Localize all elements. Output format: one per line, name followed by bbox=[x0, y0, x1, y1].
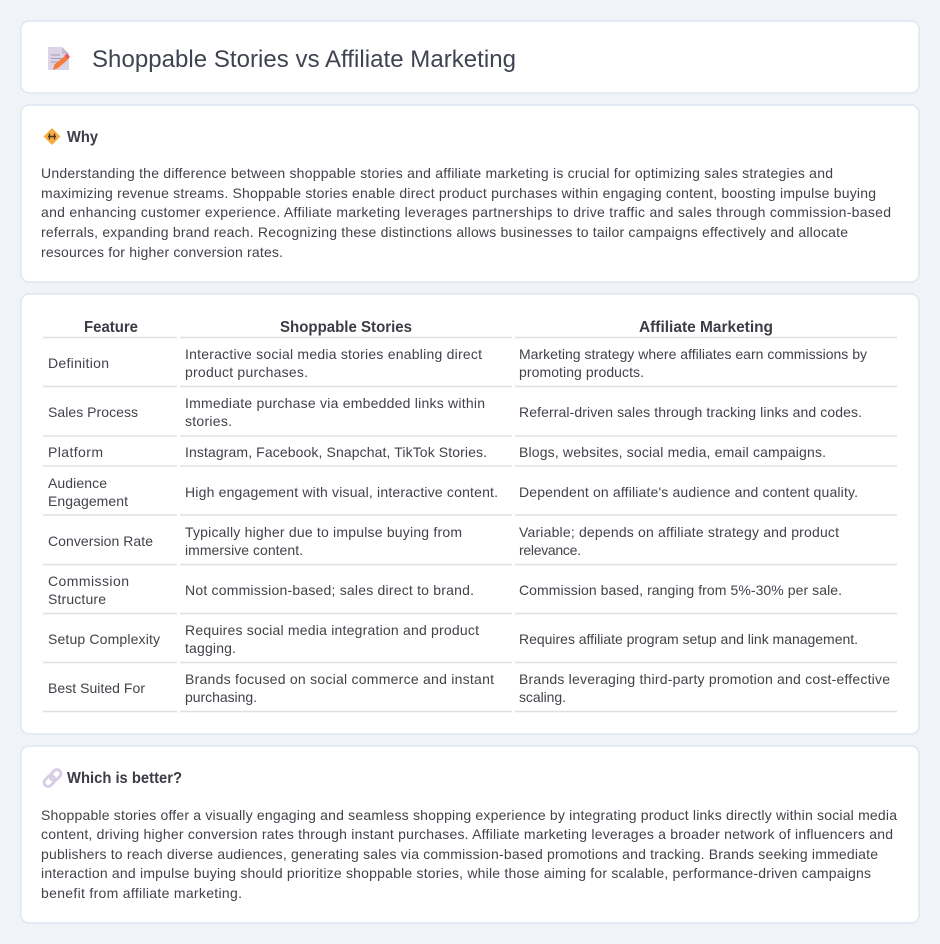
row: definition bbox=[48, 346, 867, 380]
row: commission structure: Structure bbox=[48, 591, 106, 607]
text block: which is better paragraph: content, driving higher conversion rates through instant purchases. Affiliate marketing leverages a broader network of influencers and bbox=[41, 826, 893, 842]
row: commission structure bbox=[48, 573, 842, 607]
panel: why bbox=[21, 105, 919, 282]
icon: link bbox=[42, 768, 63, 788]
row: best suited for bbox=[48, 671, 890, 705]
heading: why: Why bbox=[67, 129, 98, 146]
table header row: Shoppable Stories bbox=[280, 319, 412, 336]
row: best suited for: Best Suited For bbox=[48, 680, 145, 696]
row: conversion rate: Conversion Rate bbox=[48, 533, 153, 549]
row: platform: Platform bbox=[48, 444, 103, 460]
icon: warning diamond bbox=[44, 128, 60, 145]
row: best suited for: scaling. bbox=[519, 689, 566, 705]
text block: which is better paragraph: benefit from affiliate marketing. bbox=[41, 885, 242, 901]
row: best suited for: purchasing. bbox=[185, 689, 257, 705]
row: definition: product purchases. bbox=[185, 364, 308, 380]
text block: why paragraph: and enhancing customer experience. Affiliate marketing leverages partnerships to drive traffic and sales through commission-based bbox=[41, 204, 891, 220]
row: commission structure: Not commission-based; sales direct to brand. bbox=[185, 582, 474, 598]
row: setup complexity bbox=[48, 622, 858, 656]
row: definition: Definition bbox=[48, 355, 109, 371]
row: sales process: Immediate purchase via embedded links within bbox=[185, 395, 485, 411]
row: sales process: Sales Process bbox=[48, 404, 138, 420]
row: platform: Instagram, Facebook, Snapchat, TikTok Stories. bbox=[185, 444, 487, 460]
row: platform: Blogs, websites, social media, email campaigns. bbox=[519, 444, 826, 460]
row: best suited for: Brands focused on social commerce and instant bbox=[185, 671, 494, 687]
row: setup complexity: Requires affiliate program setup and link management. bbox=[519, 631, 858, 647]
row: definition: Interactive social media stories enabling direct bbox=[185, 346, 482, 362]
row: commission structure: Commission bbox=[48, 573, 129, 589]
row: audience engagement bbox=[48, 475, 858, 509]
row: best suited for: Brands leveraging third-party promotion and cost-effective bbox=[519, 671, 890, 687]
row: conversion rate: Typically higher due to impulse buying from bbox=[185, 524, 462, 540]
panel: title header bbox=[21, 21, 919, 93]
text block: why paragraph: maximizing revenue streams. Shoppable stories enable direct product purchases within engaging content, boosting impulse buying bbox=[41, 185, 876, 201]
row: sales process: Referral-driven sales through tracking links and codes. bbox=[519, 404, 862, 420]
table header row: Affiliate Marketing bbox=[639, 319, 773, 336]
panel: comparison table bbox=[21, 294, 919, 734]
row: conversion rate: Variable; depends on affiliate strategy and product bbox=[519, 524, 839, 540]
row: platform bbox=[48, 444, 826, 460]
row: conversion rate: immersive content. bbox=[185, 542, 303, 558]
row: audience engagement: High engagement with visual, interactive content. bbox=[185, 484, 498, 500]
title: Shoppable Stories vs Affiliate Marketing bbox=[92, 46, 516, 73]
row: audience engagement: Audience bbox=[48, 475, 107, 491]
text block: which is better paragraph: interaction and impulse buying should prioritize shoppable stories, while those aiming for scalable, performance-driven campaigns bbox=[41, 865, 871, 881]
row: definition: promoting products. bbox=[519, 364, 644, 380]
row: audience engagement: Dependent on affiliate's audience and content quality. bbox=[519, 484, 858, 500]
text block: which is better paragraph: publishers to reach diverse audiences, generating sales via commission-based promotions and tracking. Brands seeking immediate bbox=[41, 846, 878, 862]
row: setup complexity: Setup Complexity bbox=[48, 631, 160, 647]
row: audience engagement: Engagement bbox=[48, 493, 128, 509]
text block: why paragraph: Understanding the difference between shoppable stories and affiliate marketing is crucial for optimizing sales strategies and bbox=[41, 165, 833, 181]
table header row: Feature bbox=[84, 319, 138, 336]
text block: which is better paragraph: Shoppable stories offer a visually engaging and seamless shopping experience by integrating product links directly within social media bbox=[41, 807, 897, 823]
row: sales process: stories. bbox=[185, 413, 232, 429]
panel: which is better bbox=[21, 746, 919, 923]
row: setup complexity: tagging. bbox=[185, 640, 236, 656]
row: commission structure: Commission based, ranging from 5%-30% per sale. bbox=[519, 582, 842, 598]
icon: memo with pencil bbox=[48, 47, 70, 70]
row: conversion rate bbox=[48, 524, 839, 558]
text block: why paragraph bbox=[41, 165, 891, 260]
text block: which is better paragraph bbox=[41, 807, 897, 901]
row: definition: Marketing strategy where affiliates earn commissions by bbox=[519, 346, 867, 362]
row: conversion rate: relevance. bbox=[519, 542, 581, 558]
table header row bbox=[84, 319, 773, 336]
text block: why paragraph: referrals, expanding brand reach. Recognizing these distinctions allows businesses to tailor campaigns effectively and allocate bbox=[41, 224, 848, 240]
row: setup complexity: Requires social media integration and product bbox=[185, 622, 479, 638]
text block: why paragraph: resources for higher conversion rates. bbox=[41, 244, 283, 260]
row: sales process bbox=[48, 395, 862, 429]
heading: which is better: Which is better? bbox=[67, 770, 182, 787]
